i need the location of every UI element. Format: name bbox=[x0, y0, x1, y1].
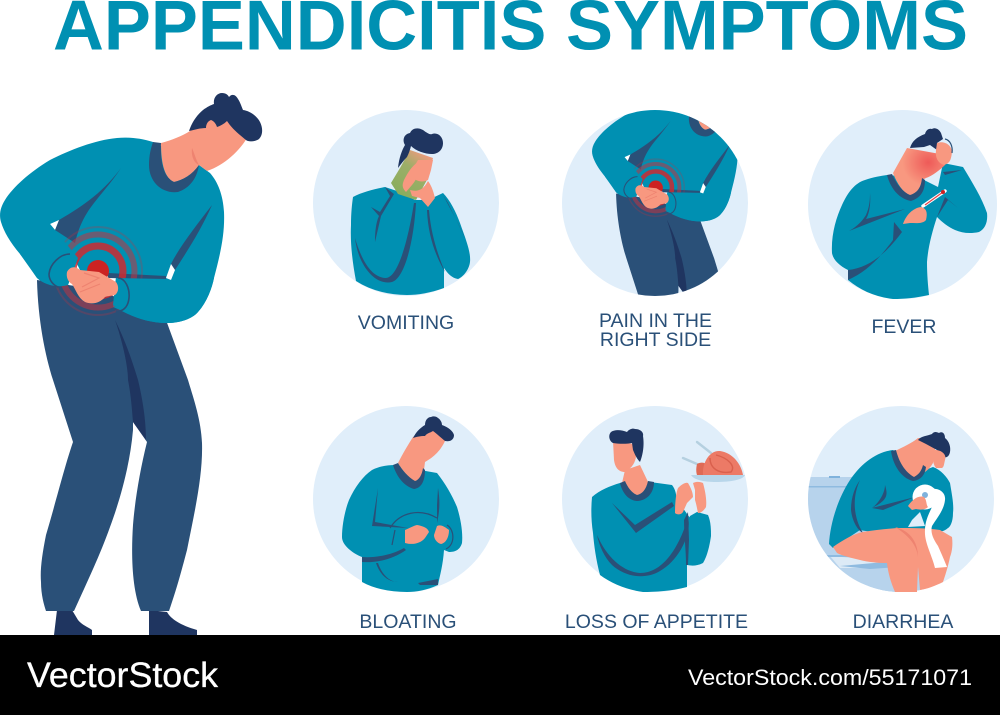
sweater fold bbox=[849, 193, 905, 231]
sweater bbox=[829, 450, 953, 548]
hand outline bbox=[945, 139, 952, 153]
label: diarrhea: DIARRHEA bbox=[853, 611, 953, 633]
label: fever: FEVER bbox=[871, 316, 937, 338]
left underarm shadow bbox=[55, 168, 121, 243]
lower band bbox=[362, 548, 406, 562]
neck and face bbox=[895, 438, 935, 479]
belly outline bbox=[390, 513, 453, 549]
hand with roll bbox=[908, 497, 928, 510]
right forearm bbox=[113, 278, 214, 323]
hand on face bbox=[933, 450, 945, 468]
label: loss of appetite: LOSS OF APPETITE bbox=[565, 611, 748, 633]
right underarm gap bbox=[166, 264, 175, 280]
sweater bbox=[591, 482, 690, 592]
sweater bbox=[342, 465, 462, 592]
hand creases bbox=[80, 273, 100, 292]
belly shadows bbox=[376, 563, 438, 585]
hair bbox=[398, 128, 443, 168]
neck and face bbox=[893, 148, 945, 196]
cuff line bbox=[943, 170, 962, 175]
roast chicken on plate bbox=[683, 442, 745, 482]
chest fold bbox=[612, 502, 674, 533]
symptom: loss of appetite bbox=[562, 406, 748, 592]
right underarm shadow bbox=[171, 205, 212, 270]
hair bbox=[609, 429, 644, 462]
collar bbox=[887, 174, 925, 201]
label: bloating: BLOATING bbox=[359, 611, 457, 633]
chest fold bbox=[872, 485, 915, 510]
icon circle bbox=[562, 110, 748, 296]
forearm bbox=[685, 512, 711, 566]
scaled figure bbox=[592, 110, 738, 296]
main figure: man clutching abdomen bbox=[0, 93, 262, 635]
trousers bbox=[37, 280, 202, 611]
label: pain in the right side, line 2: RIGHT SIDE bbox=[600, 329, 711, 351]
shoes bbox=[54, 610, 197, 635]
hair bbox=[918, 432, 950, 457]
hands bbox=[67, 267, 118, 303]
second hand bbox=[410, 181, 435, 207]
symptom: fever bbox=[808, 110, 997, 299]
neck and face bbox=[161, 105, 247, 182]
icon circle bbox=[562, 406, 748, 592]
label: pain in the right side: PAIN IN THE bbox=[599, 310, 712, 332]
under-arm gap bbox=[908, 512, 925, 527]
watermark bar bbox=[0, 635, 1000, 715]
left hand bbox=[405, 525, 429, 544]
hand holding thermometer bbox=[903, 207, 927, 224]
underarm fold bbox=[371, 187, 394, 242]
sweater fold bbox=[372, 488, 408, 528]
side fold bbox=[437, 488, 439, 523]
arm fold bbox=[937, 197, 958, 217]
collar bbox=[620, 481, 654, 501]
toilet paper roll bbox=[912, 484, 947, 568]
hair bbox=[413, 416, 454, 441]
sweater folds bbox=[355, 203, 416, 282]
arm fold bbox=[427, 195, 466, 272]
symptom: pain in the right side bbox=[562, 110, 748, 296]
side fold bbox=[851, 480, 863, 533]
sweater bbox=[832, 163, 987, 299]
waist line bbox=[108, 273, 166, 280]
cuffs bbox=[49, 254, 129, 311]
left forearm bbox=[20, 224, 78, 286]
symptom: diarrhea bbox=[800, 406, 994, 597]
icon circle bbox=[313, 406, 499, 592]
knee shadow bbox=[895, 527, 918, 557]
neck and face bbox=[398, 428, 445, 482]
hand on forehead bbox=[936, 142, 952, 165]
face bbox=[410, 160, 433, 182]
left hand bbox=[675, 483, 693, 514]
collar bbox=[891, 450, 926, 481]
hair bbox=[910, 128, 943, 150]
watermark url: VectorStock.com/55171071 bbox=[688, 665, 972, 690]
lower band bbox=[597, 518, 689, 576]
hands bbox=[403, 162, 419, 192]
collar bbox=[149, 142, 199, 192]
lower band bbox=[848, 222, 902, 280]
collar bbox=[393, 463, 425, 489]
icon circle bbox=[808, 110, 997, 299]
green vomit stream bbox=[391, 150, 433, 200]
symptom: vomiting bbox=[313, 110, 499, 296]
icon circle bbox=[808, 406, 994, 592]
sweater bbox=[0, 138, 224, 323]
toilet bbox=[808, 476, 922, 592]
symptom: bloating bbox=[313, 406, 499, 592]
trouser fold bbox=[115, 320, 146, 440]
label: vomiting: VOMITING bbox=[358, 312, 454, 334]
watermark logo: VectorStock bbox=[27, 656, 219, 695]
face bbox=[613, 441, 636, 472]
pain rings bbox=[54, 227, 142, 315]
icon circle bbox=[313, 110, 499, 296]
neck bbox=[622, 465, 649, 495]
thermometer bbox=[923, 190, 945, 206]
legs bbox=[833, 528, 952, 592]
neck shadow bbox=[192, 148, 199, 165]
right hand bbox=[693, 482, 706, 513]
left underarm gap bbox=[50, 220, 59, 230]
right hand bbox=[434, 525, 449, 544]
sweater bbox=[351, 187, 470, 295]
hair bbox=[189, 93, 262, 141]
sleeve fold bbox=[684, 512, 689, 565]
